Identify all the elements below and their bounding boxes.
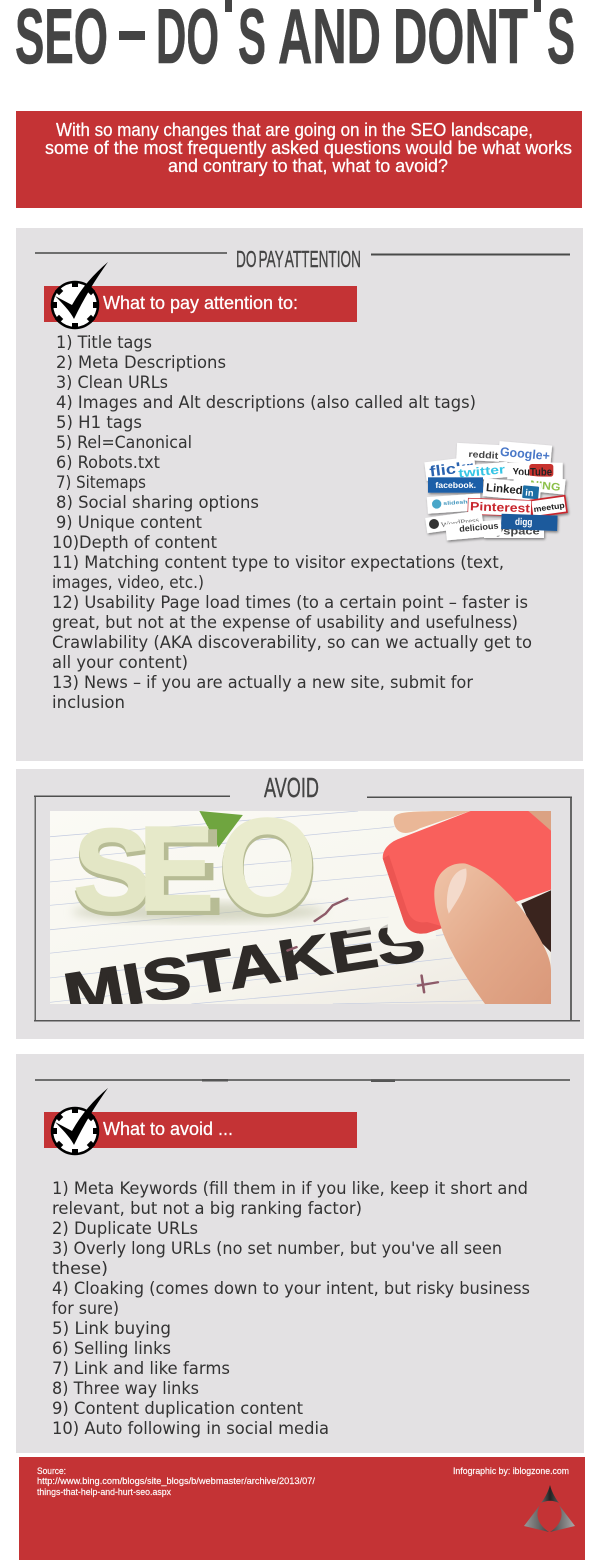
list: things to avoid: 6) Selling links (52, 1339, 171, 1358)
source text (37, 1466, 315, 1498)
heading: do pay attention: DO PAY ATTENTION (236, 246, 361, 272)
list: things to avoid: 9) Content duplication content (52, 1399, 304, 1418)
image: social media logos: facebook. (435, 481, 476, 490)
list: things to avoid: 8) Three way links (52, 1379, 199, 1398)
list: things to pay attention to: 4) Images and Alt descriptions (also called alt tags) (56, 393, 476, 412)
image: social media logos: myspace (485, 527, 540, 538)
list: things to pay attention to: 10)Depth of content (52, 533, 218, 552)
intro banner: and contrary to that, what to avoid? (168, 156, 448, 176)
list: things to pay attention to: 9) Unique content (56, 513, 203, 532)
list: things to pay attention to: 8) Social sharing options (56, 493, 259, 512)
panel: avoid (16, 769, 584, 1039)
footer (19, 1457, 585, 1560)
image: SEO mistakes eraser photo: S (74, 806, 150, 935)
image: SEO mistakes eraser photo: E (139, 803, 213, 936)
list: things to pay attention to: 7) Sitemaps (56, 473, 146, 492)
list: things to pay attention to: great, but not at the expense of usability and usefulness) (52, 613, 518, 632)
list: things to pay attention to: 2) Meta Descriptions (56, 353, 226, 372)
list: things to pay attention to: 13) News – if you are actually a new site, submit for (52, 673, 473, 692)
list: things to pay attention to: inclusion (52, 693, 125, 712)
source text: http://www.bing.com/blogs/site_blogs/b/webmaster/archive/2013/07/ (37, 1476, 315, 1487)
intro banner: some of the most frequently asked questions would be what works (45, 138, 572, 158)
list: things to pay attention to: 6) Robots.txt (56, 453, 161, 472)
panel: what to avoid (16, 1054, 584, 1453)
panel: do pay attention (16, 228, 583, 761)
image: social media logos: Pinterest (470, 499, 530, 515)
list: things to pay attention to: 11) Matching content type to visitor expectations (text, (52, 553, 504, 572)
list: things to avoid: 2) Duplicate URLs (52, 1219, 198, 1238)
intro banner: With so many changes that are going on in the SEO landscape, (56, 120, 533, 140)
sub-heading band: what to avoid (44, 1112, 357, 1148)
image: SEO mistakes eraser photo: O (219, 791, 316, 940)
icon: footer logo (524, 1485, 575, 1532)
list: things to avoid: 7) Link and like farms (52, 1359, 230, 1378)
list: things to avoid: these) (52, 1259, 108, 1278)
list: things to pay attention to: Crawlability (AKA discoverability, so can we actually get to (52, 633, 532, 652)
image: social media logos (424, 441, 570, 544)
icon: checkmark clock (52, 262, 108, 328)
image: SEO mistakes eraser photo: O (219, 794, 317, 943)
image: SEO mistakes eraser photo: S (74, 809, 152, 938)
list: things to avoid: relevant, but not a big ranking factor) (52, 1199, 362, 1218)
sub-heading band: what to pay attention to: What to pay attention to: (103, 293, 298, 313)
image: social media logos: digg (515, 517, 533, 528)
sub-heading band: what to avoid: What to avoid ... (103, 1119, 233, 1139)
image: social media logos: flickr (429, 459, 475, 480)
list: things to avoid: 5) Link buying (52, 1319, 171, 1338)
list: things to avoid: 3) Overly long URLs (no set number, but you've all seen (52, 1239, 502, 1258)
list: things to avoid: 4) Cloaking (comes down to your intent, but risky business (52, 1279, 530, 1298)
image: SEO mistakes eraser photo (50, 811, 551, 1004)
image: social media logos: twitter (458, 462, 506, 480)
icon: checkmark clock (52, 1088, 108, 1154)
image: social media logos: Google+ (499, 445, 550, 463)
source text: Source: (37, 1466, 66, 1477)
sub-heading band: what to pay attention to (44, 286, 357, 322)
source text: things-that-help-and-hurt-seo.aspx (37, 1487, 171, 1498)
list: things to avoid: for sure) (52, 1299, 119, 1318)
list: things to pay attention to (52, 333, 532, 712)
image: social media logos: Linked (486, 482, 523, 497)
list: things to avoid (52, 1179, 530, 1438)
image: SEO mistakes eraser photo: E (141, 807, 222, 939)
list: things to pay attention to: 1) Title tags (56, 333, 152, 352)
image: social media logos: delicious (459, 520, 499, 534)
title (15, 0, 575, 80)
list: things to avoid: 10) Auto following in social media (52, 1419, 329, 1438)
image: SEO mistakes eraser photo: MISTAKES (59, 907, 430, 1026)
image: social media logos: reddit (468, 449, 499, 461)
image: social media logos: in (525, 488, 534, 498)
list: things to avoid: 1) Meta Keywords (fill them in if you like, keep it short and (52, 1179, 528, 1198)
image: social media logos: YouTube (513, 466, 552, 478)
heading: avoid: AVOID (264, 772, 319, 803)
list: things to pay attention to: 12) Usability Page load times (to a certain point – faster is (52, 593, 528, 612)
list: things to pay attention to: 3) Clean URLs (56, 373, 168, 392)
list: things to pay attention to: images, video, etc.) (52, 573, 204, 592)
credit: Infographic by: iblogzone.com (453, 1466, 569, 1477)
image: social media logos: meetup (533, 501, 565, 514)
intro banner (16, 111, 582, 208)
image: social media logos: NING (529, 479, 561, 494)
list: things to pay attention to: all your content) (52, 653, 188, 672)
image: social media logos: slideshare (443, 499, 479, 507)
image: social media logos: WordPress (440, 515, 480, 529)
list: things to pay attention to: 5) H1 tags (56, 413, 142, 432)
list: things to pay attention to: 5) Rel=Canonical (56, 433, 192, 452)
